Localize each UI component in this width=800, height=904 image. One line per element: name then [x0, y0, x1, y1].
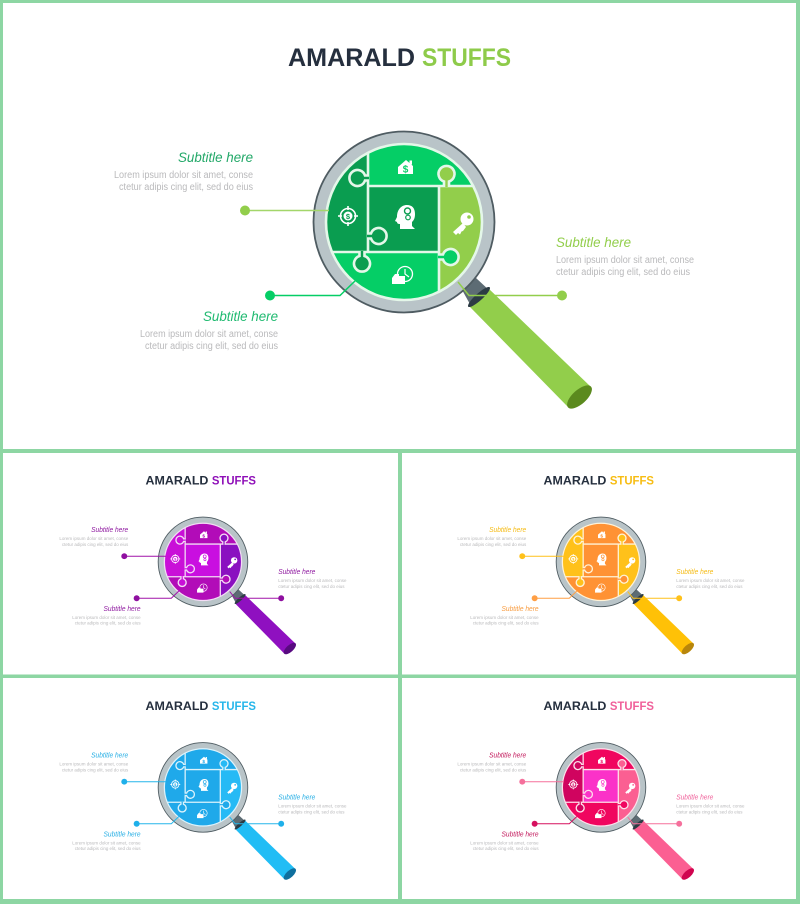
- title: AMARALD: [288, 44, 415, 72]
- text blocks: ctetur adipis cing elit, sed do eius: [473, 621, 539, 627]
- text blocks: Lorem ipsum dolor sit amet, conse: [470, 840, 539, 846]
- text blocks: ctetur adipis cing elit, sed do eius: [460, 542, 527, 548]
- icon: truck and clock: [392, 266, 412, 284]
- text block: right: ctetur adipis cing elit, sed do eius: [556, 267, 690, 278]
- text blocks: ctetur adipis cing elit, sed do eius: [75, 846, 141, 852]
- text blocks: Subtitle here: [676, 795, 713, 802]
- magnifier: [556, 742, 696, 882]
- text block: top left: [114, 149, 253, 193]
- text blocks: Lorem ipsum dolor sit amet, conse: [59, 762, 128, 768]
- text blocks: Subtitle here: [278, 795, 315, 802]
- icon: head with gears: [395, 205, 415, 229]
- text blocks: Lorem ipsum dolor sit amet, conse: [59, 536, 128, 542]
- text blocks: [457, 753, 745, 852]
- text blocks: [457, 527, 745, 627]
- magnifier: [158, 516, 298, 656]
- icon: key: [453, 212, 474, 235]
- leader: top left: [240, 206, 329, 216]
- magnifier: [556, 516, 696, 656]
- panel: pink slide: [457, 699, 745, 882]
- text block: top left: ctetur adipis cing elit, sed do eius: [119, 182, 253, 193]
- title: STUFFS: [422, 44, 511, 72]
- leaders: [519, 779, 682, 827]
- text blocks: Lorem ipsum dolor sit amet, conse: [457, 762, 526, 768]
- text blocks: Subtitle here: [91, 753, 128, 760]
- text block: right: [556, 234, 694, 278]
- leaders: [121, 779, 284, 827]
- title: STUFFS: [610, 699, 654, 713]
- title: AMARALD: [544, 474, 606, 488]
- text blocks: Subtitle here: [676, 569, 713, 576]
- text block: right: Lorem ipsum dolor sit amet, conse: [556, 255, 694, 266]
- text blocks: Lorem ipsum dolor sit amet, conse: [278, 578, 347, 584]
- text blocks: Subtitle here: [489, 527, 526, 534]
- text blocks: ctetur adipis cing elit, sed do eius: [676, 584, 743, 590]
- panel: purple slide: [59, 474, 347, 656]
- icon: house with dollar: [398, 160, 413, 176]
- text block: top left: Subtitle here: [178, 149, 253, 165]
- title: STUFFS: [212, 474, 256, 488]
- title: STUFFS: [212, 699, 256, 713]
- text blocks: Lorem ipsum dolor sit amet, conse: [72, 840, 141, 846]
- text block: bottom left: [140, 308, 278, 352]
- text blocks: Lorem ipsum dolor sit amet, conse: [676, 578, 745, 584]
- panel: main green slide: [114, 44, 694, 413]
- title: STUFFS: [610, 474, 654, 488]
- text blocks: ctetur adipis cing elit, sed do eius: [676, 810, 743, 816]
- leader: bottom left: [265, 281, 355, 300]
- title: AMARALD: [146, 699, 208, 713]
- panel: blue slide: [59, 699, 347, 882]
- text block: bottom left: Subtitle here: [203, 308, 278, 324]
- text blocks: Lorem ipsum dolor sit amet, conse: [457, 536, 526, 542]
- text block: top left: Lorem ipsum dolor sit amet, conse: [114, 170, 253, 181]
- text blocks: Lorem ipsum dolor sit amet, conse: [676, 804, 745, 810]
- text blocks: Subtitle here: [489, 753, 526, 760]
- text blocks: Subtitle here: [501, 606, 539, 613]
- icon: dollar target: [338, 206, 358, 226]
- text blocks: Lorem ipsum dolor sit amet, conse: [278, 804, 347, 810]
- text blocks: ctetur adipis cing elit, sed do eius: [460, 768, 527, 774]
- text blocks: Subtitle here: [278, 569, 315, 576]
- text blocks: ctetur adipis cing elit, sed do eius: [75, 621, 141, 627]
- text block: bottom left: ctetur adipis cing elit, sed do eius: [145, 341, 278, 352]
- text blocks: Lorem ipsum dolor sit amet, conse: [72, 615, 141, 621]
- text blocks: Subtitle here: [103, 606, 141, 613]
- text blocks: [59, 753, 347, 852]
- text blocks: Subtitle here: [501, 831, 539, 838]
- title: AMARALD: [146, 474, 208, 488]
- text blocks: Lorem ipsum dolor sit amet, conse: [470, 615, 539, 621]
- text blocks: Subtitle here: [91, 527, 128, 534]
- leaders: [121, 553, 284, 601]
- magnifier: [314, 130, 596, 413]
- leader: right: [458, 282, 567, 300]
- magnifier handle: [461, 278, 596, 413]
- text blocks: ctetur adipis cing elit, sed do eius: [278, 584, 345, 590]
- puzzle pieces: [320, 130, 499, 312]
- magnifier: [158, 742, 298, 882]
- text block: bottom left: Lorem ipsum dolor sit amet, conse: [140, 329, 278, 340]
- text blocks: [59, 527, 347, 627]
- text block: right: Subtitle here: [556, 234, 631, 250]
- title: AMARALD: [544, 699, 606, 713]
- text blocks: ctetur adipis cing elit, sed do eius: [62, 768, 129, 774]
- panel: orange slide: [457, 474, 745, 656]
- text blocks: ctetur adipis cing elit, sed do eius: [62, 542, 129, 548]
- text blocks: Subtitle here: [103, 831, 141, 838]
- lens ring: [314, 132, 494, 312]
- leaders: [519, 553, 682, 601]
- text blocks: ctetur adipis cing elit, sed do eius: [278, 810, 345, 816]
- text blocks: ctetur adipis cing elit, sed do eius: [473, 846, 539, 852]
